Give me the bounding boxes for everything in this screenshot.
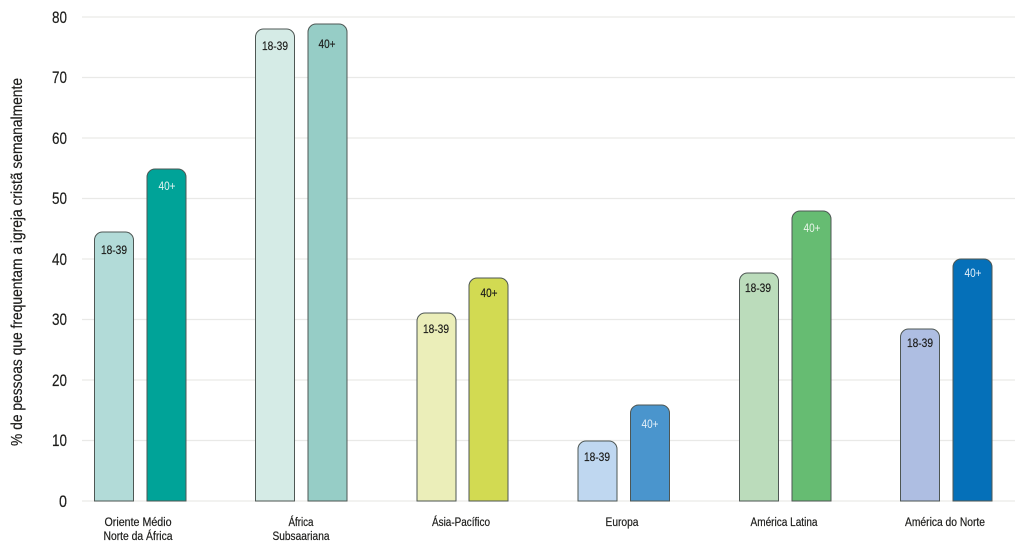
label: Europa: Europa [606, 517, 639, 529]
bar: Ásia-Pacífico 40+: 40+ [480, 286, 498, 300]
bar: Ásia-Pacífico 40+ [469, 278, 508, 501]
bar: Oriente Médio 40+ [147, 169, 186, 501]
bar: África Subsaariana 18-39 [256, 29, 294, 501]
group: Oriente Médio Norte da África [94, 169, 186, 543]
label: África Subsaariana: África [288, 516, 314, 529]
group: América do Norte [900, 259, 992, 529]
group: África Subsaariana [256, 24, 347, 543]
bar: América Latina 18-39: 18-39 [745, 281, 771, 295]
y axis labels: 60 [52, 129, 67, 148]
bar: América Latina 40+: 40+ [804, 221, 820, 235]
bar: Oriente Médio 18-39 [94, 232, 134, 501]
bar: Ásia-Pacífico 18-39: 18-39 [423, 322, 449, 336]
y axis labels: 80 [52, 8, 67, 27]
y axis labels: 50 [52, 189, 67, 208]
label: América do Norte: América do Norte [905, 517, 985, 529]
grid lines [82, 17, 1015, 501]
label: África Subsaariana [272, 516, 330, 543]
y axis labels: 40 [52, 250, 67, 269]
y axis title: % de pessoas que frequentam a igreja cristã semanalmente [9, 78, 26, 446]
bar: América do Norte 40+: 40+ [964, 266, 982, 280]
bar: América Latina 40+ [792, 211, 831, 501]
bar: África Subsaariana 40+: 40+ [318, 37, 336, 51]
bar: África Subsaariana 18-39: 18-39 [262, 39, 288, 53]
bar: Oriente Médio 40+: 40+ [158, 179, 176, 193]
y axis labels: 30 [52, 310, 67, 329]
group: América Latina [740, 211, 831, 529]
y axis labels: 70 [52, 68, 67, 87]
y axis labels: 20 [52, 371, 67, 390]
label: Oriente Médio Norte da África: Norte da África [104, 530, 173, 543]
bar: América do Norte 40+ [953, 259, 992, 501]
bar: América do Norte 18-39 [900, 329, 940, 501]
label: Ásia-Pacífico: Ásia-Pacífico [432, 516, 490, 529]
bar: América Latina 18-39 [740, 273, 778, 501]
label: América Latina: América Latina [750, 517, 818, 529]
bar: Europa 40+: 40+ [642, 417, 658, 431]
label: África Subsaariana: Subsaariana [272, 531, 330, 543]
y axis labels: 10 [52, 431, 67, 450]
bar: Europa 18-39: 18-39 [584, 450, 610, 464]
label: Oriente Médio Norte da África [104, 517, 173, 543]
group: Ásia-Pacífico [417, 278, 508, 529]
bar: América do Norte 18-39: 18-39 [907, 336, 933, 350]
label: Oriente Médio Norte da África: Oriente Médio [104, 517, 172, 529]
y axis labels [52, 8, 67, 511]
bar: África Subsaariana 40+ [308, 24, 347, 501]
bar: Ásia-Pacífico 18-39 [417, 313, 456, 501]
y axis labels: 0 [59, 492, 67, 511]
bar: Oriente Médio 18-39: 18-39 [101, 243, 127, 257]
group: Europa [578, 405, 670, 529]
